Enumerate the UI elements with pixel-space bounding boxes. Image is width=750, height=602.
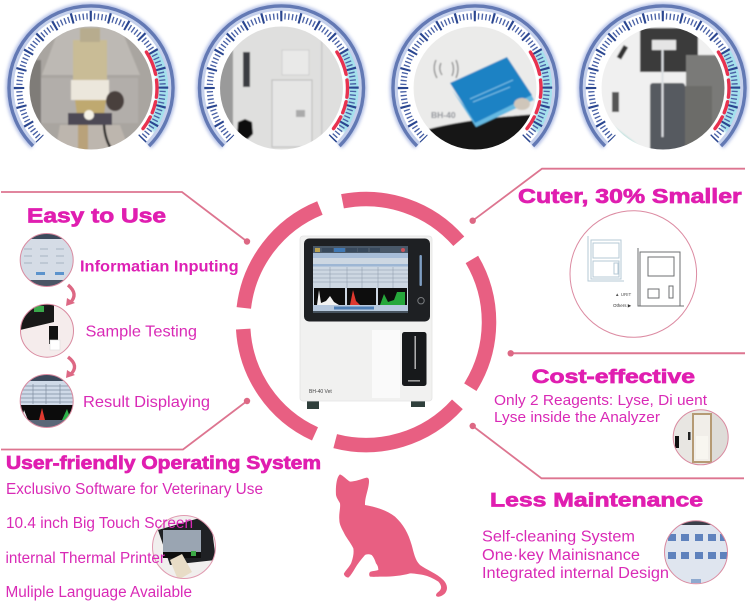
photo: lyse inside analyzer — [673, 410, 730, 466]
step photo: result display — [20, 374, 74, 428]
diagram legend: ▲ URIT — [615, 292, 631, 297]
gauge 1: flow chamber photo — [8, 5, 174, 154]
text: languages: Muliple Language Available — [6, 584, 192, 601]
photo: maintenance menu — [664, 520, 728, 584]
device slider strip — [420, 255, 422, 286]
device model label: BH-40 Vet — [309, 389, 332, 395]
device screen bezel — [304, 238, 430, 322]
connector: easy to use — [1, 192, 250, 245]
text: result display: Result Displaying — [83, 394, 210, 411]
text: thermal printer: internal Thermal Printer — [6, 550, 165, 567]
connector: operating system — [1, 398, 250, 450]
small analyzer outline — [588, 236, 624, 281]
step photo: sample testing — [20, 304, 74, 358]
text: reagents: Only 2 Reagents: Lyse, Di uent — [494, 392, 708, 409]
heading: cost-effective: Cost-effective — [532, 367, 695, 388]
text: exclusive software: Exclusivo Software for Veterinary Use — [6, 481, 263, 498]
device feet — [307, 400, 425, 409]
gauge 3: RFID reagent card photo: BH-40 — [431, 110, 456, 120]
gauge 2: analyzer rear panel photo — [198, 5, 364, 154]
large analyzer outline — [638, 248, 684, 306]
gauge 3: RFID reagent card photo — [392, 5, 558, 154]
central segmented ring — [243, 199, 489, 445]
arrow: step 1 to 2 — [66, 285, 75, 306]
step photo: information input screen — [20, 233, 74, 287]
size comparison diagram: Others ▶ — [613, 303, 632, 308]
connector: less maintenance — [470, 423, 744, 478]
text: integrated design: Integrated internal Design — [482, 565, 669, 582]
device body — [300, 236, 432, 401]
operating system feature list — [6, 481, 263, 601]
connector: smaller — [470, 169, 745, 224]
analyzer device — [300, 236, 432, 409]
gauge 4: sample probe photo — [580, 5, 746, 154]
text: self-cleaning: Self-cleaning System — [482, 529, 635, 546]
heading: operating system: User-friendly Operating System — [6, 453, 321, 473]
connector: cost-effective — [508, 350, 745, 356]
size comparison diagram — [570, 211, 697, 337]
text: one-key maintenance: One·key Mainisnance — [482, 547, 640, 564]
text: information inputting: Informatian Inputing — [80, 259, 239, 276]
text: lyse inside: Lyse inside the Analyzer — [494, 409, 660, 426]
device sample slot — [402, 332, 426, 386]
arrow: step 2 to 3 — [66, 357, 75, 378]
text: sample testing: Sample Testing — [86, 324, 197, 341]
device power button — [418, 298, 424, 304]
photo: touch screen in use — [152, 515, 216, 580]
cat silhouette — [336, 474, 447, 597]
text: touch screen: 10.4 inch Big Touch Screen — [6, 515, 193, 532]
heading: easy to use: Easy to Use — [27, 206, 166, 228]
heading: cuter smaller: Cuter, 30% Smaller — [518, 186, 742, 208]
heading: less maintenance: Less Maintenance — [490, 491, 703, 512]
device touch screen — [313, 246, 408, 313]
